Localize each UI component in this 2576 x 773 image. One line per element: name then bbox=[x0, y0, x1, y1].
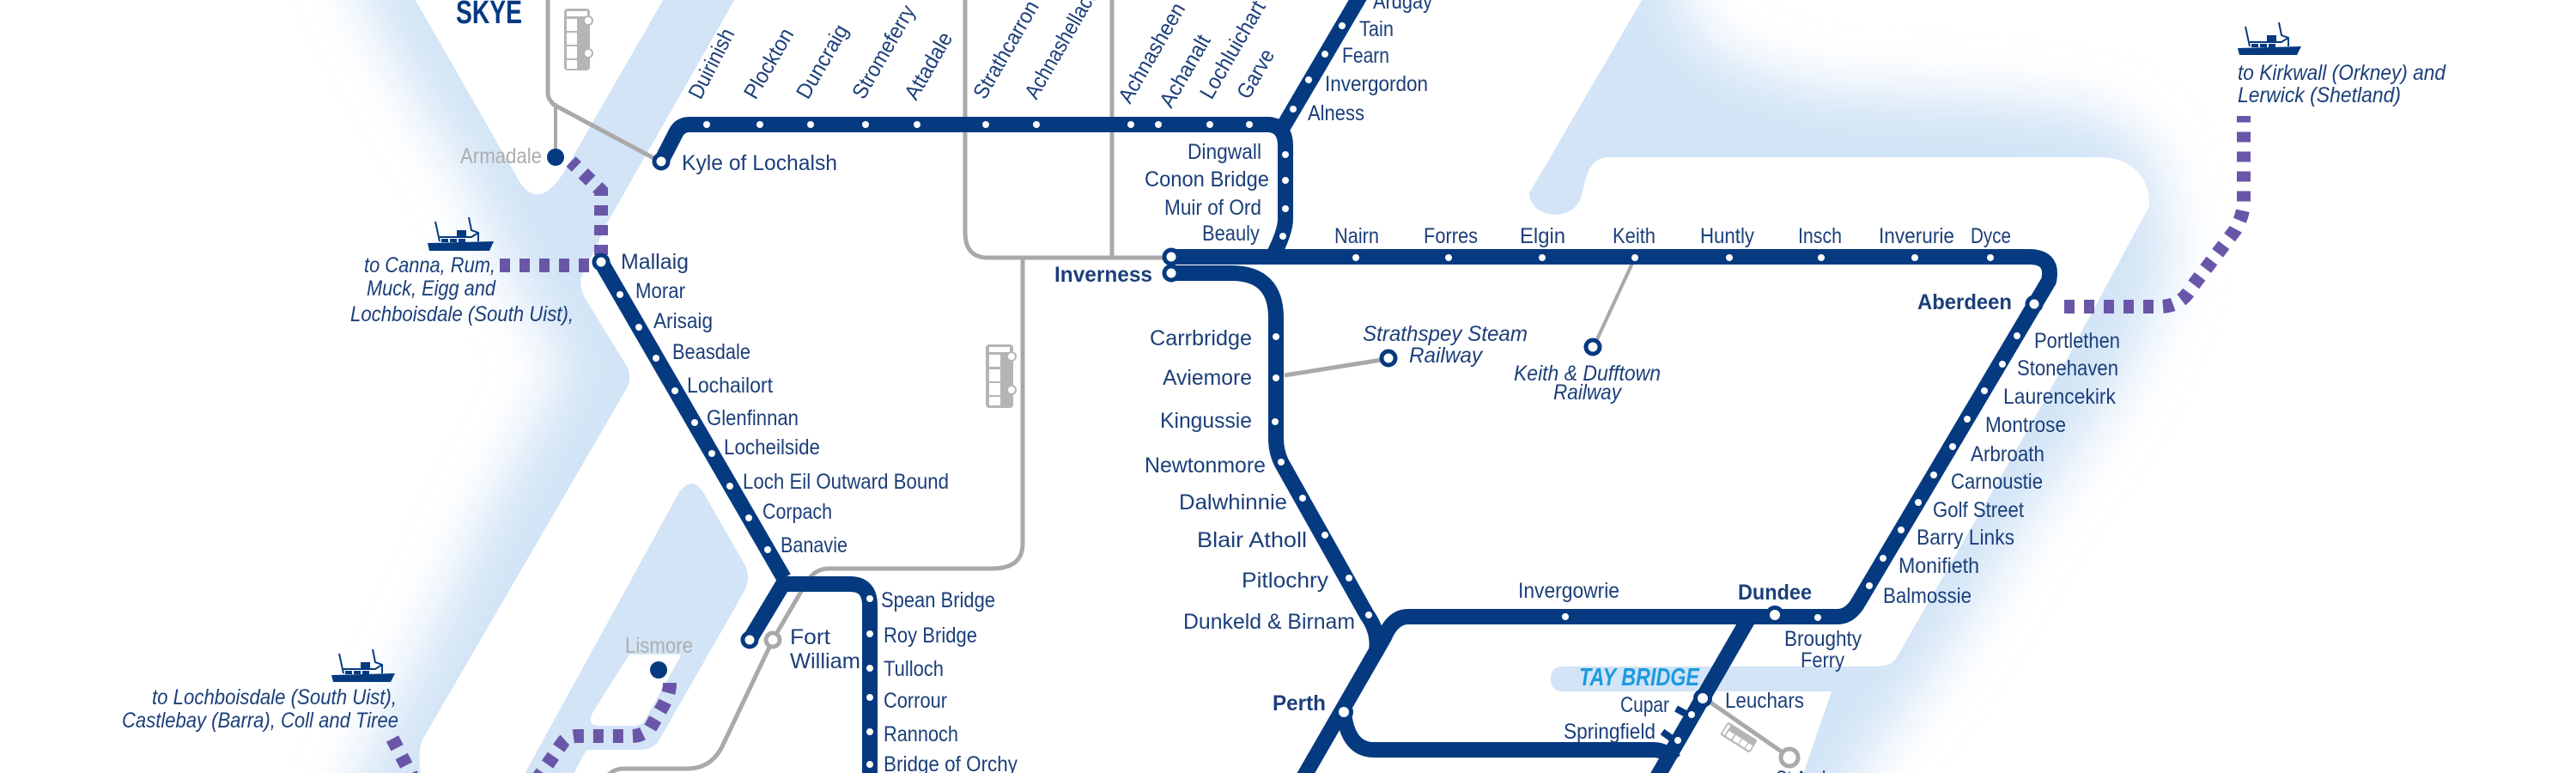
labels: ferry destinations: to Lochboisdale (South Uist), bbox=[152, 685, 397, 709]
tick: Springfield bbox=[1662, 732, 1674, 740]
line: Highland Main Line bbox=[1171, 273, 1377, 651]
labels: Far North and Inverness area: Invergordon bbox=[1325, 72, 1428, 96]
labels: Highland Main Line bbox=[1145, 326, 1355, 634]
labels: stations west: Rannoch bbox=[884, 722, 958, 746]
station: Perth bbox=[1336, 704, 1352, 720]
line: Strathspey link bbox=[1285, 360, 1382, 375]
ferry: Mallaig to Armadale bbox=[571, 161, 601, 255]
labels: Aberdeen to Dundee: Stonehaven bbox=[2017, 356, 2118, 380]
labels: islands and grey stops bbox=[456, 0, 693, 658]
labels: heritage railways: Keith & Dufftown bbox=[1514, 362, 1661, 386]
ferry: Oban to Lismore bbox=[537, 683, 670, 773]
labels: stations west: Corpach bbox=[762, 500, 832, 524]
labels: Highland Main Line: Blair Atholl bbox=[1197, 528, 1307, 552]
labels: ferry destinations: to Kirkwall (Orkney) and bbox=[2238, 61, 2446, 85]
station: Kyle of Lochalsh bbox=[654, 155, 668, 168]
sea: west coast gradient bbox=[335, 0, 748, 773]
labels: Highland Main Line: Kingussie bbox=[1160, 409, 1252, 433]
labels: Inverness to Aberdeen: Aberdeen bbox=[1917, 290, 2012, 314]
land: mainland bbox=[419, 0, 2149, 773]
labels: Aberdeen to Dundee: Portlethen bbox=[2034, 329, 2120, 353]
labels: stations west: Tulloch bbox=[884, 657, 944, 681]
labels: Inverness to Aberdeen bbox=[1334, 224, 2012, 314]
labels: Highland Main Line: Dalwhinnie bbox=[1179, 490, 1287, 514]
ferry routes bbox=[392, 116, 2244, 773]
labels: Aberdeen to Dundee: Barry Links bbox=[1917, 526, 2014, 550]
labels: ferry destinations: Muck, Eigg and bbox=[367, 277, 496, 301]
labels: Kyle line rotated stations: Garve bbox=[1232, 45, 1279, 103]
labels: heritage railways: Railway bbox=[1409, 344, 1483, 368]
labels: heritage railways: Railway bbox=[1553, 380, 1622, 405]
labels: ferry destinations: to Canna, Rum, bbox=[364, 253, 495, 277]
icon: bus on Skye bbox=[564, 9, 592, 70]
station: Keith and Dufftown Railway bbox=[1586, 340, 1600, 354]
label: Tay Bridge: TAY BRIDGE bbox=[1579, 664, 1700, 691]
labels: Inverness to Aberdeen: Elgin bbox=[1520, 224, 1565, 248]
labels: ferry destinations: Lerwick (Shetland) bbox=[2238, 83, 2401, 107]
icon: ferry to Small Isles bbox=[428, 217, 494, 251]
labels: Highland Main Line: Pitlochry bbox=[1242, 569, 1329, 593]
labels: Inverness to Aberdeen: Keith bbox=[1613, 224, 1656, 248]
labels: Far North and Inverness area: Conon Bridge bbox=[1145, 167, 1269, 192]
stop: Armadale bbox=[547, 149, 564, 166]
labels: Kyle line rotated stations: Achanalt bbox=[1155, 30, 1216, 112]
labels: Inverness to Aberdeen: Inverurie bbox=[1879, 224, 1954, 248]
labels: Inverness to Aberdeen: Dyce bbox=[1971, 224, 2011, 248]
labels: Far North and Inverness area: Alness bbox=[1308, 101, 1364, 125]
labels: Inverness to Aberdeen: Forres bbox=[1424, 224, 1478, 248]
labels: ferry destinations bbox=[122, 61, 2446, 733]
labels: stations west: Roy Bridge bbox=[884, 624, 977, 648]
labels: Aberdeen to Dundee: Perth bbox=[1273, 691, 1326, 715]
line: Far North bbox=[1282, 0, 1363, 129]
sea: east coast gradient bbox=[1529, 0, 2191, 773]
labels: heritage railways: Strathspey Steam bbox=[1363, 322, 1528, 346]
station: St Andrews bbox=[1781, 749, 1798, 766]
station: Strathspey Steam Railway bbox=[1382, 351, 1395, 365]
station: Inverness north bbox=[1164, 250, 1178, 264]
grey connecting lines bbox=[548, 0, 1783, 773]
labels: Far North and Inverness area: Fearn bbox=[1342, 44, 1389, 68]
labels: Aberdeen to Dundee: Leuchars bbox=[1725, 689, 1804, 713]
sea: Firth of Tay strip bbox=[1551, 666, 1881, 691]
labels: Far North and Inverness area: Beauly bbox=[1202, 222, 1260, 246]
labels: Kyle line rotated stations: Plockton bbox=[739, 24, 799, 103]
labels: Far North and Inverness area: Dingwall bbox=[1188, 140, 1261, 164]
labels: Kyle line rotated stations: Duncraig bbox=[792, 21, 854, 103]
labels: Far North and Inverness area: Inverness bbox=[1054, 263, 1152, 287]
labels: Kyle line rotated stations: Duirinish bbox=[683, 25, 739, 103]
label: Armadale: Armadale bbox=[460, 144, 542, 168]
labels: stations west: Locheilside bbox=[724, 435, 820, 460]
station: Inverness south bbox=[1164, 266, 1178, 280]
icon: bus St Andrews bbox=[1720, 721, 1758, 753]
panel: sea and land background bbox=[292, 0, 2172, 773]
station: Leuchars bbox=[1695, 691, 1710, 706]
line: St Andrews link bbox=[1704, 698, 1783, 752]
ferry: Aberdeen to Orkney and Shetland bbox=[2064, 116, 2244, 307]
labels: Aberdeen to Dundee: Invergowrie bbox=[1518, 579, 1619, 603]
icon: ferry to outer isles bbox=[331, 649, 395, 682]
labels: Highland Main Line: Dunkeld & Birnam bbox=[1183, 610, 1355, 634]
line: Perth to Ladybank bbox=[1344, 713, 1674, 760]
ferry: Oban to outer isles bbox=[392, 739, 414, 773]
labels: Inverness to Aberdeen: Insch bbox=[1798, 224, 1842, 248]
navy rail lines bbox=[601, 0, 2050, 773]
labels: stations west: Loch Eil Outward Bound bbox=[743, 470, 949, 494]
icon: bus Inverness bbox=[986, 344, 1016, 408]
station: Aberdeen bbox=[2027, 297, 2041, 311]
ferry: Mallaig to the Small Isles bbox=[498, 259, 589, 272]
labels: Kyle line rotated stations bbox=[683, 0, 1279, 112]
labels: Aberdeen to Dundee: Arbroath bbox=[1971, 442, 2044, 466]
line: Keith and Dufftown link bbox=[1597, 258, 1635, 339]
labels: stations west: Spean Bridge bbox=[881, 588, 995, 612]
tick: Cupar bbox=[1676, 709, 1689, 715]
labels: Inverness to Aberdeen: Nairn bbox=[1334, 224, 1379, 248]
icon: ferry to Orkney and Shetland bbox=[2238, 22, 2301, 55]
labels: Highland Main Line: Aviemore bbox=[1163, 366, 1252, 390]
labels: Aberdeen to Dundee: Laurencekirk bbox=[2003, 385, 2116, 409]
labels: Highland Main Line: Newtonmore bbox=[1145, 453, 1266, 478]
line: Armadale spur bbox=[554, 103, 557, 157]
stop: Lismore bbox=[650, 661, 667, 679]
labels: Far North and Inverness area: Tain bbox=[1359, 17, 1394, 41]
land: isle of Skye bbox=[410, 0, 668, 194]
labels: stations west: William bbox=[790, 649, 860, 673]
labels: ferry destinations: Castlebay (Barra), Coll and Tiree bbox=[122, 709, 398, 733]
label: Lismore: Lismore bbox=[625, 634, 693, 658]
land: isle of Lismore bbox=[591, 654, 681, 726]
labels: Aberdeen to Dundee: Dundee bbox=[1738, 581, 1812, 605]
labels: ferry destinations: Lochboisdale (South Uist), bbox=[350, 302, 574, 326]
line: Skye bus routes bbox=[548, 0, 657, 160]
labels: stations west: Kyle of Lochalsh bbox=[682, 151, 837, 175]
labels: stations west: Glenfinnan bbox=[707, 406, 799, 430]
labels: Highland Main Line: Carrbridge bbox=[1150, 326, 1252, 350]
labels: stations west: Lochailort bbox=[687, 374, 773, 398]
line: Gairloch coach bbox=[1109, 0, 1115, 257]
line: Kyle line and to Inverness bbox=[661, 125, 1285, 257]
line: Inverness to Aberdeen to Dundee to Perth bbox=[1171, 257, 2050, 773]
labels: Aberdeen to Dundee: Springfield bbox=[1564, 720, 1656, 744]
labels: Aberdeen to Dundee: Carnoustie bbox=[1951, 470, 2043, 494]
line: Inverness to Fort William and south bbox=[605, 258, 1023, 773]
station: Mallaig bbox=[594, 255, 608, 269]
labels: Far North and Inverness area: Muir of Ord bbox=[1164, 196, 1261, 220]
labels: Aberdeen to Dundee: Ferry bbox=[1801, 648, 1844, 673]
labels: Aberdeen to Dundee: Balmossie bbox=[1883, 584, 1971, 608]
labels: Aberdeen to Dundee: Golf Street bbox=[1933, 498, 2024, 522]
line: Tay Bridge bbox=[1656, 613, 1752, 773]
terminal: Fort William spur bbox=[743, 633, 756, 647]
labels: Aberdeen to Dundee: Cupar bbox=[1620, 693, 1669, 717]
interchange circles bbox=[547, 149, 2041, 766]
labels: stations west bbox=[621, 151, 1018, 773]
station: Dundee bbox=[1767, 608, 1783, 622]
labels: stations west: Fort bbox=[790, 625, 830, 649]
station dots bbox=[617, 22, 2020, 768]
labels: stations west: Corrour bbox=[884, 689, 947, 713]
line: Fort William spur bbox=[750, 584, 783, 640]
line: Mallaig branch bbox=[601, 262, 784, 578]
labels: Aberdeen to Dundee: Monifieth bbox=[1899, 554, 1979, 578]
line: Ullapool coach bbox=[965, 0, 1171, 258]
labels: Aberdeen to Dundee bbox=[1273, 329, 2120, 773]
line: West Highland south bbox=[777, 584, 870, 773]
labels: stations west: Banavie bbox=[781, 533, 848, 557]
labels: Far North and Inverness area bbox=[1054, 0, 1432, 287]
labels: stations west: Beasdale bbox=[672, 340, 750, 364]
labels: stations west: Arisaig bbox=[653, 309, 713, 333]
labels: Aberdeen to Dundee: Broughty bbox=[1784, 627, 1862, 651]
labels: Kyle line rotated stations: Attadale bbox=[900, 28, 957, 104]
labels: stations west: Mallaig bbox=[621, 250, 689, 274]
station: Fort William bbox=[766, 633, 780, 647]
labels: Aberdeen to Dundee: Montrose bbox=[1985, 413, 2066, 437]
labels: heritage railways bbox=[1363, 322, 1661, 405]
labels: Inverness to Aberdeen: Huntly bbox=[1700, 224, 1754, 248]
labels: stations west: Morar bbox=[635, 279, 685, 303]
